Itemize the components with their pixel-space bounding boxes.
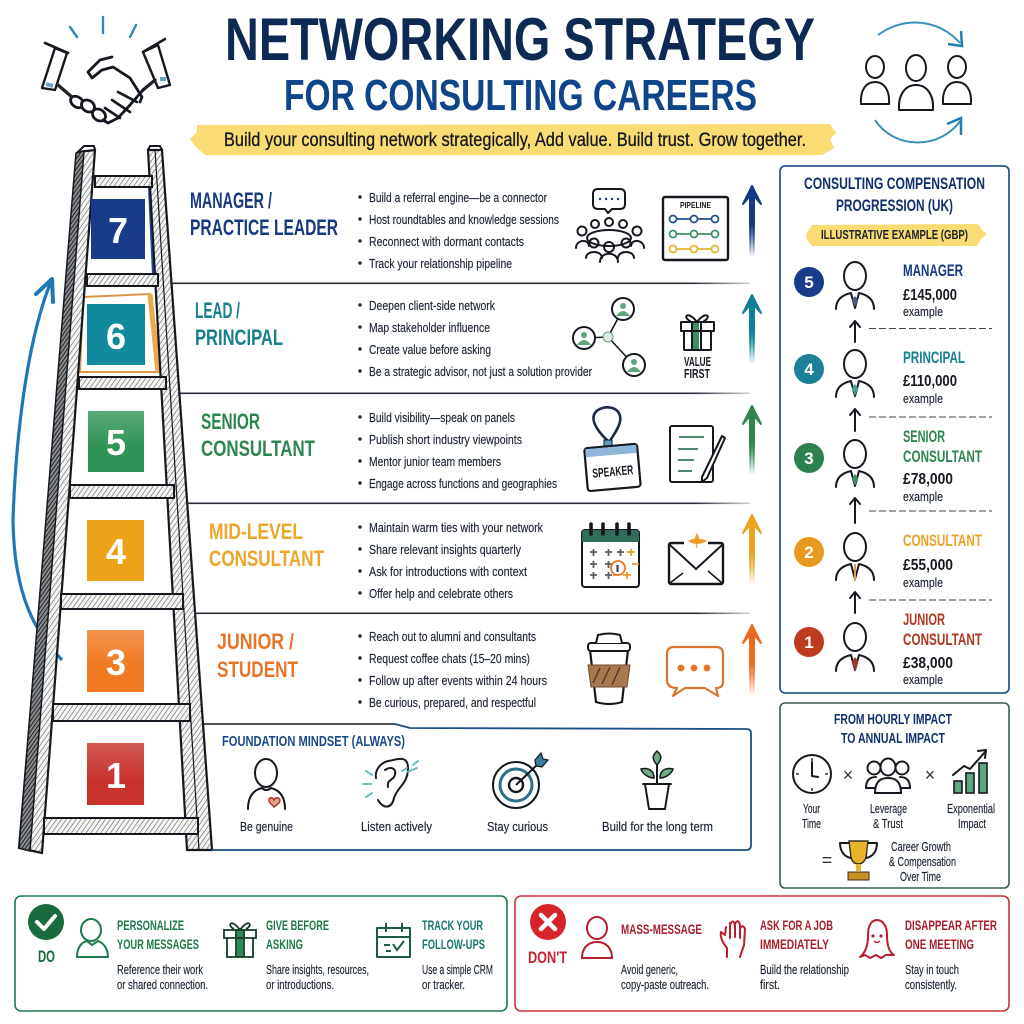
consultant level: CONSULTANT xyxy=(903,531,982,550)
bullets: Reconnect with dormant contacts xyxy=(369,234,524,249)
principal level xyxy=(794,348,965,406)
principal level: PRINCIPAL xyxy=(903,348,965,367)
equals: = xyxy=(822,850,832,870)
bullets: Request coffee chats (15–20 mins) xyxy=(369,651,530,666)
step 5: 5 xyxy=(106,422,126,463)
heading: MANAGER / xyxy=(190,188,272,213)
principal level: example xyxy=(903,392,943,406)
tip: personalize: YOUR MESSAGES xyxy=(117,936,199,952)
bullets: Create value before asking xyxy=(369,342,491,357)
tip: disappear: consistently. xyxy=(905,978,957,992)
icon: notes and pen xyxy=(670,426,725,482)
panel: senior consultant xyxy=(201,406,761,491)
senior consultant level: SENIOR xyxy=(903,427,945,446)
ladder illustration xyxy=(19,146,212,853)
icon: trophy xyxy=(840,841,877,880)
panel: mid-level consultant xyxy=(209,515,761,601)
tip: mass-message xyxy=(582,917,709,992)
tip: ask for a job: Build the relationship xyxy=(760,963,849,977)
step 1: 1 xyxy=(106,755,126,796)
bullets xyxy=(358,298,593,379)
arrow xyxy=(743,295,761,362)
bullets xyxy=(358,629,547,710)
icon: target xyxy=(493,753,548,808)
heading: PRINCIPAL xyxy=(195,325,283,350)
result text: & Compensation xyxy=(889,855,956,869)
consultant level xyxy=(794,531,982,590)
icon: plant xyxy=(641,751,673,809)
heading xyxy=(209,519,324,571)
arrow: career climb xyxy=(13,279,62,660)
tip: personalize xyxy=(77,917,208,992)
labels: Impact xyxy=(958,817,986,831)
bullets: Publish short industry viewpoints xyxy=(369,432,522,447)
icon: handshake xyxy=(42,17,170,124)
junior consultant level: example xyxy=(903,673,943,687)
tag: ILLUSTRATIVE EXAMPLE (GBP) xyxy=(821,227,968,242)
icon: value first gift: VALUE xyxy=(684,355,711,369)
step 3: 3 xyxy=(106,642,126,683)
tip: mass-message: copy-paste outreach. xyxy=(621,978,709,992)
labels: Your xyxy=(803,802,820,816)
arrow xyxy=(743,406,761,473)
tip: personalize: PERSONALIZE xyxy=(117,917,184,933)
panel: do xyxy=(15,896,507,1011)
bullets: Map stakeholder influence xyxy=(369,320,490,335)
bullets: Share relevant insights quarterly xyxy=(369,542,521,557)
junior consultant level: CONSULTANT xyxy=(903,630,982,649)
step 1 xyxy=(87,743,144,805)
arrow xyxy=(743,186,761,255)
step 5 xyxy=(88,411,144,472)
panel: hourly to annual impact xyxy=(780,703,1009,888)
arrow xyxy=(743,625,761,693)
icon: listening ear xyxy=(363,759,418,807)
consultant level: 2 xyxy=(804,543,814,562)
bullets: Build visibility—speak on panels xyxy=(369,410,515,425)
labels: & Trust xyxy=(873,817,903,831)
icon: chat bubble xyxy=(667,647,723,696)
bullets: Reach out to alumni and consultants xyxy=(369,629,536,644)
icon: envelope xyxy=(669,534,723,584)
bullets: Ask for introductions with context xyxy=(369,564,527,579)
bullets: Host roundtables and knowledge sessions xyxy=(369,212,559,227)
tip: ask for a job: IMMEDIATELY xyxy=(760,936,829,952)
labels: Stay curious xyxy=(487,820,548,834)
manager level: 5 xyxy=(804,273,814,292)
icon: value first gift xyxy=(681,315,714,381)
tip: track follow-ups xyxy=(377,917,493,992)
tip: give before asking: Share insights, resources, xyxy=(266,963,369,977)
heading: TO ANNUAL IMPACT xyxy=(841,731,945,747)
icon: genuine person xyxy=(248,759,285,809)
operator: × xyxy=(925,765,935,785)
step 7 xyxy=(91,199,145,259)
icon: growth bars xyxy=(953,750,987,793)
tip: track follow-ups: Use a simple CRM xyxy=(422,963,493,977)
heading: FROM HOURLY IMPACT xyxy=(834,712,952,728)
junior consultant level: £38,000 xyxy=(903,655,953,672)
junior consultant level xyxy=(794,610,982,687)
step 7: 7 xyxy=(108,210,128,251)
manager level: £145,000 xyxy=(903,287,957,304)
bullets: Be curious, prepared, and respectful xyxy=(369,695,536,710)
heading xyxy=(804,174,985,215)
consultant level: example xyxy=(903,576,943,590)
step 4 xyxy=(87,520,144,581)
bullets: Track your relationship pipeline xyxy=(369,256,512,271)
tip: disappear: ONE MEETING xyxy=(905,936,974,952)
bullets: Be a strategic advisor, not just a solution provider xyxy=(369,364,593,379)
heading: JUNIOR / xyxy=(217,629,294,654)
icon: calendar xyxy=(582,524,639,587)
tip: track follow-ups: TRACK YOUR xyxy=(422,917,483,933)
tip: give before asking: ASKING xyxy=(266,936,303,952)
icon: team xyxy=(866,758,910,793)
panel: foundation mindset xyxy=(203,724,751,850)
tip: ask for a job xyxy=(721,917,849,992)
tag xyxy=(806,224,987,246)
bullets: Deepen client-side network xyxy=(369,298,495,313)
principal level: £110,000 xyxy=(903,373,957,390)
tip: disappear: Stay in touch xyxy=(905,963,959,977)
tip: track follow-ups: FOLLOW-UPS xyxy=(422,936,485,952)
bullets xyxy=(358,190,559,271)
icon: clock xyxy=(793,755,831,793)
panel: don't xyxy=(515,896,1009,1011)
senior consultant level: 3 xyxy=(804,449,814,468)
heading: SENIOR xyxy=(201,409,260,434)
manager level: example xyxy=(903,305,943,319)
labels: Exponential xyxy=(947,802,995,816)
heading xyxy=(834,712,952,747)
result text: Career Growth xyxy=(891,840,951,854)
tip: ask for a job: first. xyxy=(760,978,780,992)
panel: manager / practice leader xyxy=(190,186,761,271)
panel: junior / student xyxy=(217,625,761,710)
labels: Time xyxy=(802,817,821,831)
senior consultant level: CONSULTANT xyxy=(903,447,982,466)
subtitle banner: Build your consulting network strategically, Add value. Build trust. Grow together. xyxy=(224,130,806,151)
labels: Listen actively xyxy=(361,820,433,834)
icon: roundtable xyxy=(576,189,644,262)
title: FOR CONSULTING CAREERS xyxy=(284,71,757,120)
consultant level: £55,000 xyxy=(903,557,953,574)
icon: check xyxy=(28,904,64,940)
tip: give before asking: GIVE BEFORE xyxy=(266,917,329,933)
tip: mass-message: Avoid generic, xyxy=(621,963,678,977)
icon: network map xyxy=(573,298,645,376)
icon: value first gift: FIRST xyxy=(684,367,710,381)
labels xyxy=(240,820,713,834)
panel: lead / principal xyxy=(195,295,761,381)
senior consultant level: £78,000 xyxy=(903,471,953,488)
bullets: Build a referral engine—be a connector xyxy=(369,190,548,205)
manager level: MANAGER xyxy=(903,261,963,280)
tip: give before asking xyxy=(224,917,369,992)
title: NETWORKING STRATEGY xyxy=(225,6,815,73)
icon: pipeline board xyxy=(663,197,728,260)
tip: disappear xyxy=(860,917,997,992)
icon: speaker badge: SPEAKER xyxy=(592,462,634,481)
heading: MID-LEVEL xyxy=(209,519,303,544)
step 6: 6 xyxy=(106,316,126,357)
heading: PROGRESSION (UK) xyxy=(836,196,953,215)
heading: PRACTICE LEADER xyxy=(190,215,338,240)
tip: ask for a job: ASK FOR A JOB xyxy=(760,917,833,933)
label: DON'T xyxy=(528,948,567,967)
manager level xyxy=(794,261,963,319)
heading: FOUNDATION MINDSET (ALWAYS) xyxy=(222,734,405,750)
heading: LEAD / xyxy=(195,298,240,323)
icon: speaker badge xyxy=(584,407,641,491)
bullets: Engage across functions and geographies xyxy=(369,476,557,491)
step 3 xyxy=(87,630,144,692)
bullets xyxy=(358,520,543,601)
bullets: Maintain warm ties with your network xyxy=(369,520,543,535)
labels xyxy=(802,802,995,831)
icon: coffee cup xyxy=(588,634,630,704)
junior consultant level: 1 xyxy=(804,633,814,652)
senior consultant level xyxy=(794,427,982,504)
bullets: Offer help and celebrate others xyxy=(369,586,513,601)
operator: × xyxy=(843,765,853,785)
label: DO xyxy=(38,947,55,966)
heading: STUDENT xyxy=(217,657,298,682)
junior consultant level: JUNIOR xyxy=(903,610,945,629)
tip: mass-message: MASS-MESSAGE xyxy=(621,921,702,937)
result text: Over Time xyxy=(900,870,941,884)
heading xyxy=(190,188,338,240)
tip: give before asking: or introductions. xyxy=(266,978,334,992)
title xyxy=(225,6,815,120)
senior consultant level: example xyxy=(903,490,943,504)
heading xyxy=(217,629,298,682)
labels: Be genuine xyxy=(240,820,293,834)
icon: cross xyxy=(530,904,566,940)
heading: CONSULTANT xyxy=(201,436,315,461)
bullets: Mentor junior team members xyxy=(369,454,501,469)
icon: pipeline board: PIPELINE xyxy=(680,200,711,210)
panel: compensation progression xyxy=(780,166,1009,693)
tip: track follow-ups: or tracker. xyxy=(422,978,465,992)
labels: Leverage xyxy=(870,802,907,816)
step 4: 4 xyxy=(106,531,126,572)
bullets: Follow up after events within 24 hours xyxy=(369,673,547,688)
labels: Build for the long term xyxy=(602,820,713,834)
heading xyxy=(201,409,315,461)
tip: personalize: Reference their work xyxy=(117,963,204,977)
bullets xyxy=(358,410,557,491)
tip: personalize: or shared connection. xyxy=(117,978,208,992)
heading: CONSULTANT xyxy=(209,546,324,571)
icon: people with cycle arrows xyxy=(861,23,971,143)
principal level: 4 xyxy=(804,360,814,379)
result text xyxy=(889,840,956,884)
arrow xyxy=(743,515,761,583)
heading xyxy=(195,298,283,350)
subtitle banner xyxy=(190,124,836,155)
step 6 xyxy=(87,304,145,365)
